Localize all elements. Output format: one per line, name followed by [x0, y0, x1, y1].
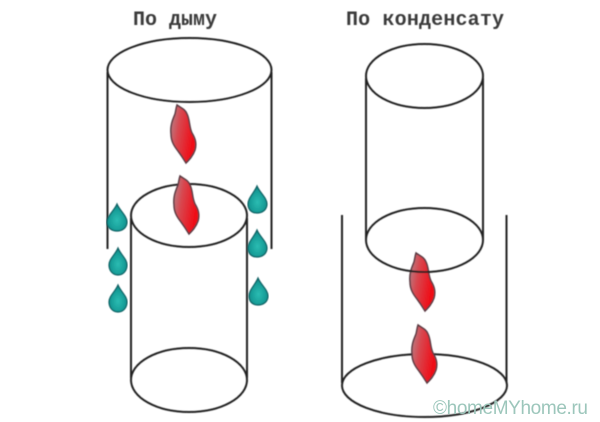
- watermark: ©homeMYhome.ru: [433, 398, 588, 419]
- condensate drops: right: [248, 186, 268, 305]
- condensate drops: left: [107, 204, 127, 312]
- flame: lower pipe: [174, 176, 199, 234]
- outer pipe: [342, 215, 507, 417]
- flame: upper pipe: [171, 105, 196, 163]
- heading: by smoke: По дыму: [133, 9, 217, 32]
- upper pipe: [108, 38, 272, 249]
- lower pipe: [131, 184, 247, 412]
- inner pipe: [366, 44, 483, 272]
- flame: inner pipe: [410, 253, 435, 311]
- diagram: smoke connection: [108, 38, 272, 412]
- diagram: condensate connection: [342, 44, 507, 417]
- heading: by condensate: По конденсату: [346, 9, 504, 32]
- flame: outer pipe: [412, 325, 437, 383]
